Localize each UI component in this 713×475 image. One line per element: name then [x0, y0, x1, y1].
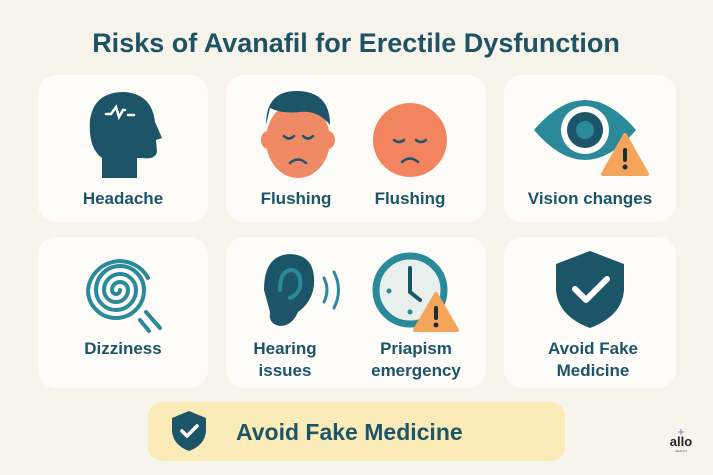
- icon: spiral: [88, 261, 160, 331]
- label: hearing: Hearing: [253, 339, 317, 358]
- banner: [148, 402, 565, 461]
- panel: headache: [38, 75, 208, 222]
- panel: hearing & priapism: emergency: [371, 361, 461, 380]
- icon: shield check: [556, 251, 624, 328]
- logo: HEALTH: [675, 449, 687, 453]
- icon: ear: [264, 254, 338, 326]
- label: flushing 2: Flushing: [375, 189, 445, 208]
- panel: flushing: [226, 75, 486, 222]
- icon: clock with warning: [376, 256, 457, 330]
- panel: dizziness: [38, 237, 208, 388]
- label: headache: Headache: [83, 189, 163, 208]
- icon: face 2: [373, 103, 447, 177]
- label: vision: Vision changes: [528, 189, 652, 208]
- label: priapism: Priapism: [380, 339, 452, 358]
- panel: avoid fake medicine: Medicine: [557, 361, 629, 380]
- panel: hearing & priapism: issues: [259, 361, 311, 380]
- label: avoid fake medicine: Avoid Fake: [548, 339, 638, 358]
- panel: avoid fake medicine: [504, 237, 676, 388]
- icon: eye with warning: [534, 100, 647, 174]
- icon: face 1: [261, 91, 335, 178]
- banner text: Avoid Fake Medicine: [236, 419, 463, 445]
- logo: allo: [670, 434, 692, 449]
- label: dizziness: Dizziness: [84, 339, 162, 358]
- label: flushing 1: Flushing: [261, 189, 331, 208]
- icon: head: [90, 92, 162, 178]
- title: Risks of Avanafil for Erectile Dysfunction: [92, 28, 620, 58]
- logo: [670, 429, 692, 453]
- panel: hearing & priapism: [226, 237, 486, 388]
- panel: vision: [504, 75, 676, 222]
- icon: small shield: [172, 411, 206, 451]
